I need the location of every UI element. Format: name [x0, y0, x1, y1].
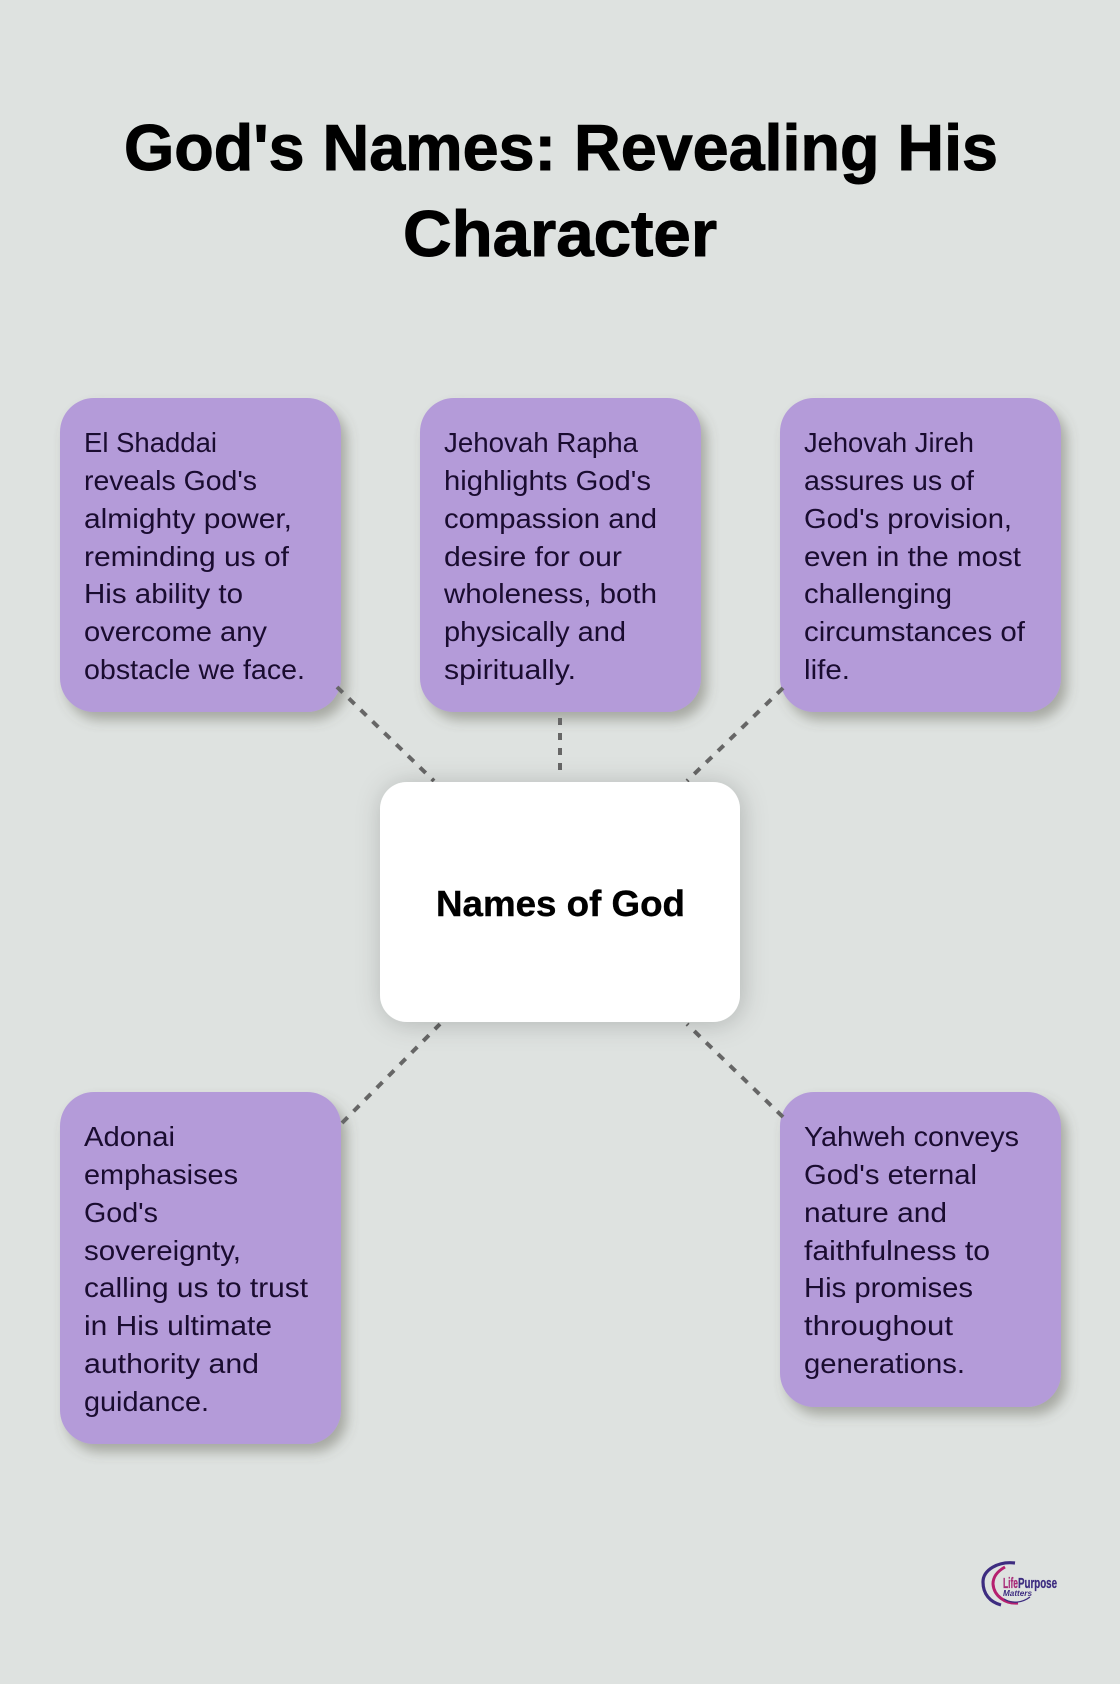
panel: Jehovah Jireh: life. [804, 654, 850, 685]
logo: Life Purpose Matters: Purpose [1018, 1575, 1057, 1592]
title [124, 111, 998, 270]
panel: Jehovah Rapha: compassion and [444, 503, 657, 534]
panel: El Shaddai: almighty power, [84, 503, 292, 534]
panel: El Shaddai: overcome any [84, 616, 267, 647]
panel: Jehovah Jireh [780, 398, 1061, 712]
connector: Jehovah Rapha to center [558, 718, 562, 776]
panel: Jehovah Jireh: Jehovah Jireh [804, 427, 974, 458]
panel: Jehovah Jireh: circumstances of [804, 616, 1025, 647]
panel: Adonai: in His ultimate [84, 1310, 272, 1341]
connector: Yahweh to center [687, 1024, 783, 1117]
panel: Jehovah Jireh: even in the most [804, 541, 1021, 572]
panel: Jehovah Rapha: physically and [444, 616, 626, 647]
panel: El Shaddai: reminding us of [84, 541, 289, 572]
panel: center node [380, 782, 740, 1022]
panel: Jehovah Rapha: wholeness, both [443, 578, 657, 609]
panel: Adonai: emphasises [84, 1159, 238, 1190]
logo: Life Purpose Matters: Life [1003, 1575, 1018, 1592]
panel: El Shaddai [60, 398, 341, 712]
panel: Yahweh: His promises [804, 1272, 973, 1303]
title: Character [403, 197, 717, 270]
panel: Jehovah Jireh: challenging [804, 578, 952, 609]
panel: center node: Names of God [436, 883, 685, 924]
panel: Adonai: Adonai [84, 1121, 175, 1152]
panel: Jehovah Rapha: Jehovah Rapha [444, 427, 638, 458]
panel: Adonai: authority and [84, 1348, 259, 1379]
panel: Yahweh: God's eternal [804, 1159, 977, 1190]
connector: Jehovah Jireh to center [687, 688, 783, 781]
panel: Yahweh: Yahweh conveys [804, 1121, 1019, 1152]
panel: Jehovah Rapha: highlights God's [444, 465, 651, 496]
title: God's Names: Revealing His [124, 111, 998, 184]
logo: Life Purpose Matters: Matters [1003, 1589, 1033, 1598]
panel: Adonai: sovereignty, [84, 1235, 241, 1266]
panel: Jehovah Rapha: desire for our [444, 541, 622, 572]
panel: El Shaddai: reveals God's [84, 465, 257, 496]
panel: Adonai: guidance. [84, 1386, 209, 1417]
panel: Jehovah Rapha: spiritually. [444, 654, 576, 685]
panel: El Shaddai: His ability to [84, 578, 243, 609]
logo: Life Purpose Matters [983, 1563, 1057, 1605]
panel: Jehovah Jireh: God's provision, [804, 503, 1012, 534]
connector: Adonai to center [342, 1024, 440, 1123]
panel: El Shaddai: obstacle we face. [84, 654, 305, 685]
panel: Adonai: calling us to trust [84, 1272, 308, 1303]
panel: Yahweh: nature and [804, 1197, 947, 1228]
panel: Yahweh: generations. [804, 1348, 965, 1379]
panel: Adonai [60, 1092, 341, 1444]
connector: El Shaddai to center [337, 687, 434, 781]
panel: Jehovah Jireh: assures us of [804, 465, 974, 496]
panel: Yahweh [780, 1092, 1061, 1407]
panel: El Shaddai: El Shaddai [84, 427, 217, 458]
panel: Yahweh: faithfulness to [804, 1235, 990, 1266]
panel: Adonai: God's [84, 1197, 158, 1228]
panel: Yahweh: throughout [804, 1310, 953, 1341]
panel: Jehovah Rapha [420, 398, 701, 712]
